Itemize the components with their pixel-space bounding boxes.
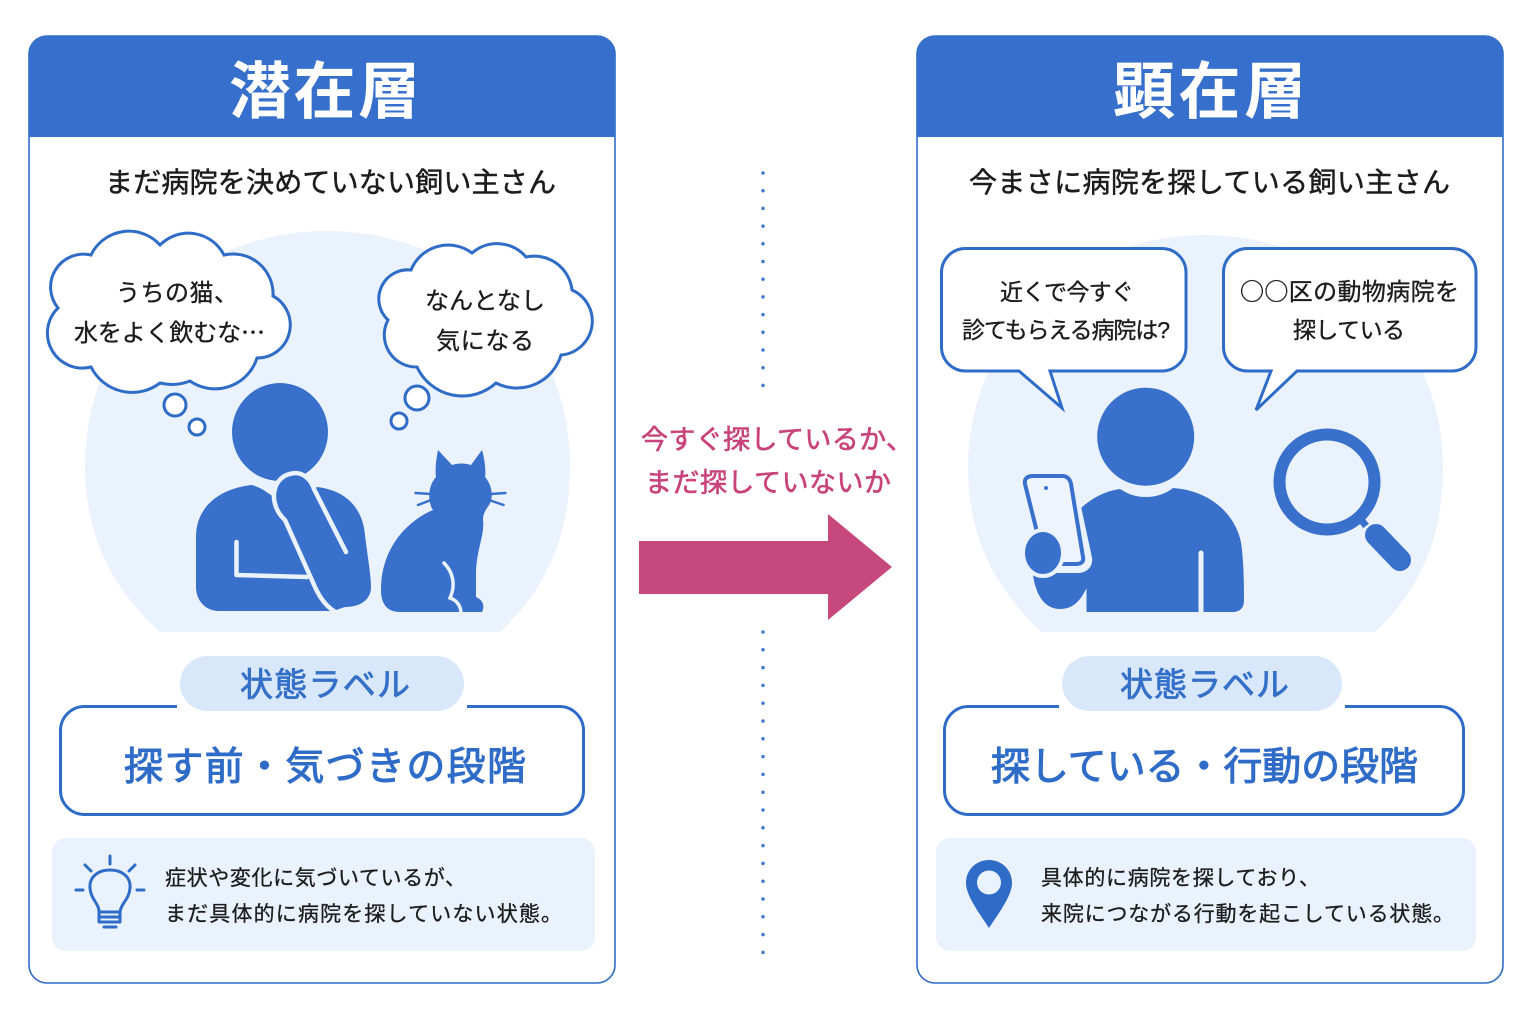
thought bubble: cat drinks water: うちの猫、 xyxy=(116,280,238,307)
center question text: まだ探していないか xyxy=(645,468,891,498)
panel: 顕在層 xyxy=(917,36,1503,983)
info panel: 来院につながる行動を起こしている状態。 xyxy=(1041,903,1454,926)
header: 顕在層 xyxy=(917,36,1503,137)
status box xyxy=(944,706,1464,814)
info panel: まだ具体的に病院を探していない状態。 xyxy=(165,903,562,926)
divider: upper dotted line xyxy=(761,173,765,392)
thought bubble: somehow concerned: なんとなし xyxy=(425,288,545,315)
status label pill: 状態ラベル xyxy=(240,666,410,703)
panel: 潜在層 xyxy=(29,36,615,983)
icon: thinking person xyxy=(196,383,371,611)
speech bubble: nearby clinic: 診てもらえる病院は? xyxy=(962,317,1170,343)
subtitle: 今まさに病院を探している飼い主さん xyxy=(969,167,1450,198)
status label pill xyxy=(1059,656,1345,712)
status box: 探している・行動の段階 xyxy=(991,746,1418,789)
icon: magnifying glass xyxy=(1280,434,1400,560)
header: 潜在層: 潜在層 xyxy=(229,58,420,127)
thought bubble: somehow concerned xyxy=(379,244,592,429)
info panel: 症状や変化に気づいているが、 xyxy=(165,867,466,890)
info panel: 具体的に病院を探しており、 xyxy=(1041,867,1320,890)
thought bubble: cat drinks water xyxy=(47,231,290,435)
status box xyxy=(60,706,584,814)
illustration background xyxy=(968,235,1443,632)
header: 顕在層: 顕在層 xyxy=(1113,58,1306,127)
speech bubble: nearby clinic: 近くで今すぐ xyxy=(1000,279,1134,305)
divider: lower dotted line xyxy=(761,632,765,960)
header: 潜在層 xyxy=(29,36,615,137)
thought bubble: cat drinks water: 水をよく飲むな… xyxy=(74,313,265,348)
info panel xyxy=(52,838,595,951)
center question text xyxy=(641,425,913,498)
speech bubble: searching: 探している xyxy=(1293,317,1405,343)
speech bubble: nearby clinic xyxy=(942,248,1186,408)
arrow xyxy=(639,514,892,620)
icon: person with smartphone xyxy=(1023,388,1244,612)
status label pill: 状態ラベル xyxy=(1120,666,1289,703)
speech bubble: searching xyxy=(1224,248,1476,410)
center question text: 今すぐ探しているか、 xyxy=(641,425,913,455)
info panel xyxy=(936,838,1476,951)
icon: light bulb xyxy=(76,856,144,927)
subtitle: まだ病院を決めていない飼い主さん xyxy=(105,167,556,198)
icon: map pin xyxy=(966,860,1012,928)
thought bubble: somehow concerned: 気になる xyxy=(436,328,534,355)
icon: cat xyxy=(381,450,505,612)
speech bubble: searching: ○○区の動物病院を xyxy=(1240,272,1459,307)
status label pill xyxy=(177,656,467,712)
illustration background xyxy=(85,231,570,632)
status box: 探す前・気づきの段階 xyxy=(124,746,526,789)
